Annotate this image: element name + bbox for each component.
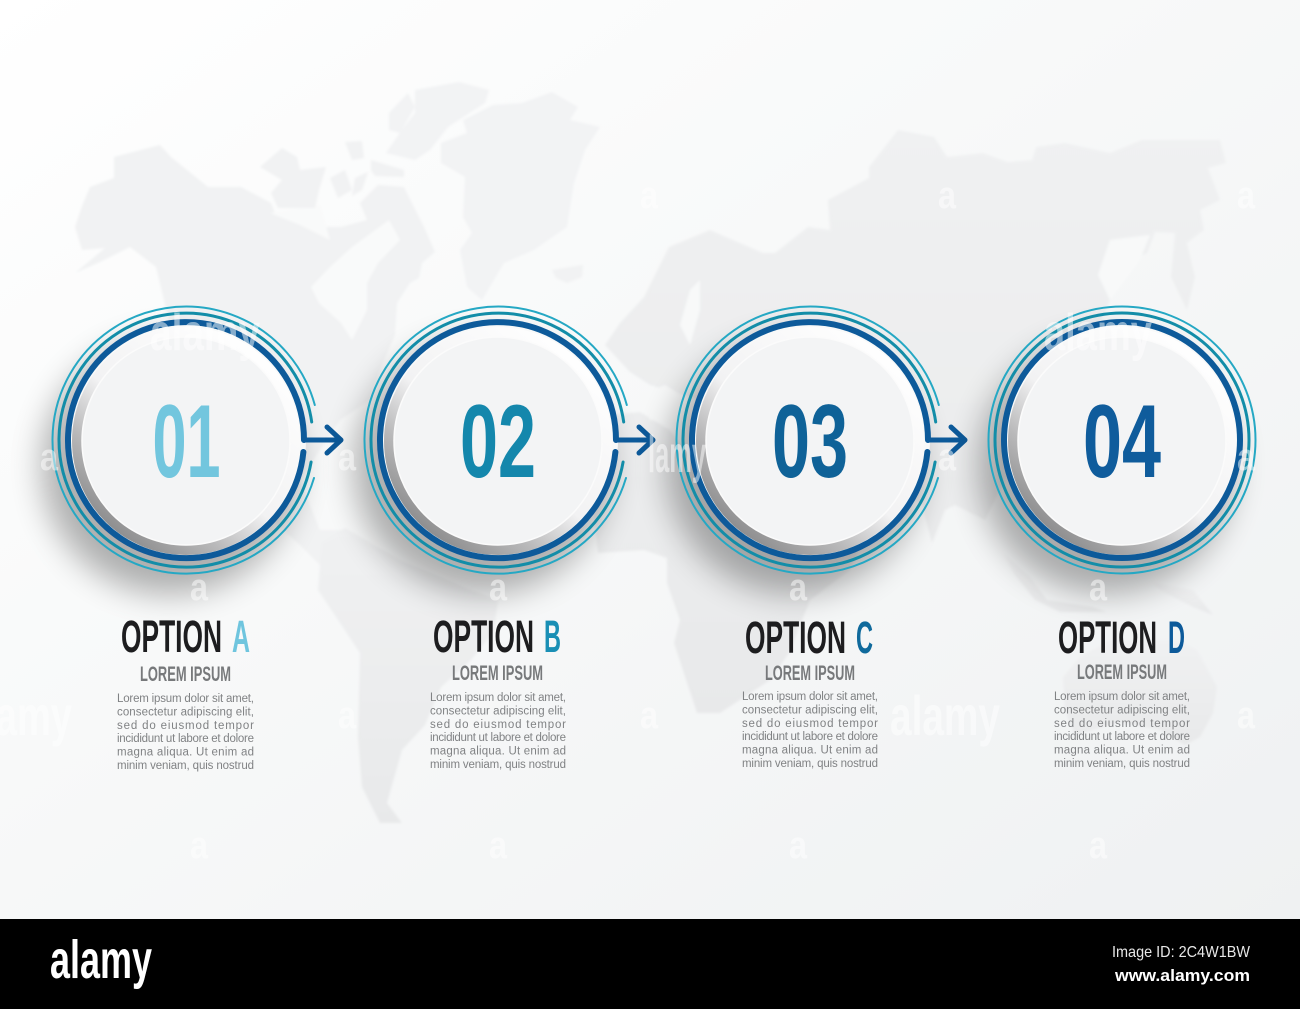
image id: Image ID: 2C4W1BW [1112,944,1251,961]
watermarks: alamy [890,684,1000,747]
body text B: sed do eiusmod tempor [430,719,566,731]
body text D: sed do eiusmod tempor [1054,718,1190,730]
subheading D: LOREM IPSUM [1077,661,1167,684]
body text B: consectetur adipiscing elit, [430,706,566,718]
watermarks: a [1237,437,1256,479]
watermarks: alamy [1044,304,1152,362]
body text C: magna aliqua. Ut enim ad [742,744,878,756]
body text A [117,693,254,772]
watermarks: alamy [150,304,260,362]
number 04: 04 [1083,384,1161,500]
watermarks: a [489,567,508,609]
step 1 circle [42,307,341,594]
body text C: Lorem ipsum dolor sit amet, [742,691,878,703]
body text C: sed do eiusmod tempor [742,718,878,730]
watermarks [0,175,1256,867]
body text C: consectetur adipiscing elit, [742,704,878,716]
footer bar [0,919,1300,1009]
body text D: magna aliqua. Ut enim ad [1054,744,1190,756]
body text B: incididunt ut labore et dolore [430,732,566,744]
watermarks: a [40,437,59,479]
body text B: minim veniam, quis nostrud [430,759,566,771]
watermarks: a [1089,825,1108,867]
body text D: consectetur adipiscing elit, [1054,704,1190,716]
option D text block [1054,612,1190,770]
option A text block [117,611,254,772]
body text C: incididunt ut labore et dolore [742,731,878,743]
world map [75,82,1226,823]
option C text block [742,612,878,770]
body text B: magna aliqua. Ut enim ad [430,746,566,758]
watermarks: a [1089,567,1108,609]
step 4 circle [978,306,1256,594]
number 03: 03 [772,384,848,500]
body text C [742,691,878,770]
subheading A: LOREM IPSUM [140,663,231,686]
body text B: Lorem ipsum dolor sit amet, [430,692,566,704]
number 01: 01 [152,384,220,500]
watermarks: a [789,825,808,867]
watermarks: a [640,695,659,737]
body text D: Lorem ipsum dolor sit amet, [1054,691,1190,703]
website: www.alamy.com [1114,966,1250,985]
body text A: Lorem ipsum dolor sit amet, [117,693,254,705]
step 3 circle [666,307,965,594]
watermarks: a [640,175,659,217]
body text A: magna aliqua. Ut enim ad [117,746,254,758]
heading: option C: OPTION [745,612,846,663]
heading: option D: D [1168,612,1185,663]
heading: option B: B [544,611,561,662]
watermarks: a [938,175,957,217]
body text A: incididunt ut labore et dolore [117,733,254,745]
step 2 circle [354,307,653,594]
watermarks: a [1237,695,1256,737]
heading: option A: OPTION [121,611,222,662]
watermarks: a [190,825,209,867]
subheading B: LOREM IPSUM [452,662,543,685]
watermarks: a [1237,175,1256,217]
arrow 3 [928,427,965,453]
body text A: minim veniam, quis nostrud [117,760,254,772]
body text D: incididunt ut labore et dolore [1054,731,1190,743]
watermarks: a [338,695,357,737]
arrow 2 [616,427,653,453]
arrow 1 [304,427,341,453]
body text D: minim veniam, quis nostrud [1054,758,1190,770]
body text C: minim veniam, quis nostrud [742,758,878,770]
subheading C: LOREM IPSUM [765,662,855,685]
heading: option C: C [856,612,873,663]
watermarks: a [938,437,957,479]
watermarks: lamy [648,426,706,484]
body text B [430,692,566,771]
heading: option D: OPTION [1058,612,1157,663]
number 02: 02 [460,384,536,500]
body text D [1054,691,1190,770]
watermarks: a [789,567,808,609]
watermarks: a [489,825,508,867]
body text A: sed do eiusmod tempor [117,720,254,732]
heading: option B: OPTION [433,611,534,662]
alamy logo: alamy [50,930,152,990]
body text A: consectetur adipiscing elit, [117,706,254,718]
watermarks: a [338,437,357,479]
option B text block [430,611,566,771]
heading: option A: A [232,611,250,662]
watermarks: a [190,567,209,609]
